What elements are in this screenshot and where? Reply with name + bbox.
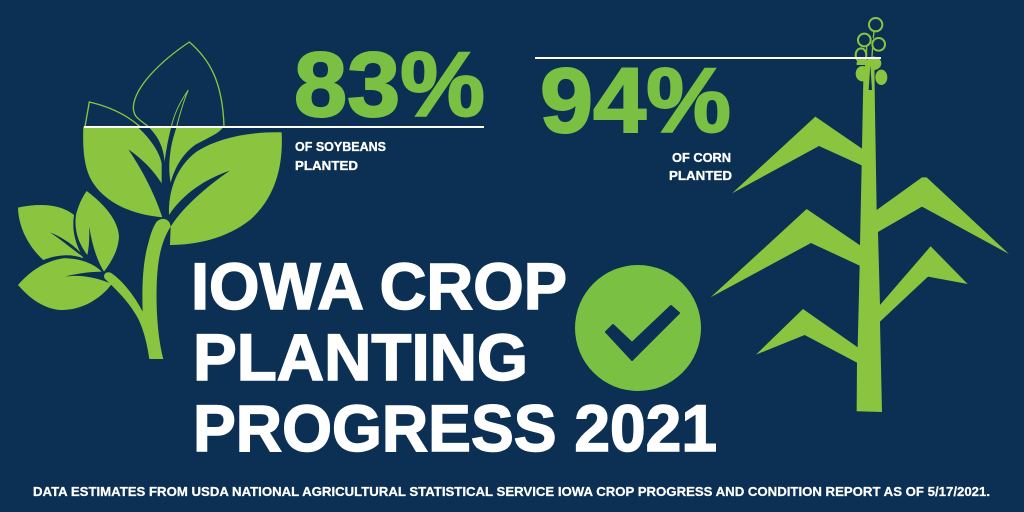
icon: soybean plant	[18, 42, 282, 359]
soybean label: PLANTED	[295, 159, 358, 173]
corn label	[669, 151, 732, 183]
title: PLANTING	[193, 320, 528, 394]
corn percentage: 94%	[540, 50, 731, 152]
corn label: OF CORN	[672, 151, 731, 165]
soybean label: OF SOYBEANS	[295, 140, 386, 154]
divider line: corn	[535, 57, 881, 59]
corn label: PLANTED	[669, 169, 732, 183]
source footnote: DATA ESTIMATES FROM USDA NATIONAL AGRICULTURAL STATISTICAL SERVICE IOWA CROP PROGRESS AND CONDITION REPORT AS OF 5/17/2021.	[33, 485, 990, 499]
soybean percentage: 83%	[294, 34, 485, 136]
divider line: soybeans	[84, 126, 484, 128]
title: PROGRESS 2021	[193, 391, 717, 465]
title: IOWA CROP	[191, 249, 567, 323]
soybean label	[295, 140, 386, 173]
icon: check mark badge	[575, 265, 701, 391]
icon: corn stalk	[711, 18, 1009, 412]
title	[191, 249, 717, 465]
